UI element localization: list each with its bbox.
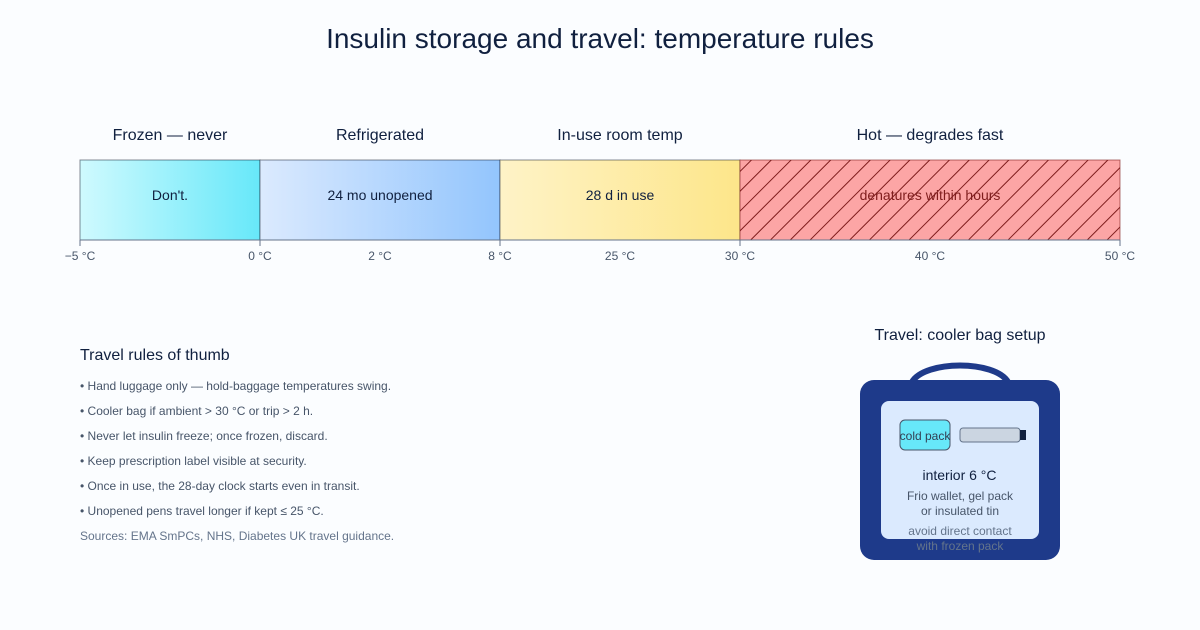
zone label: in-use: 28 d in use xyxy=(586,187,654,203)
panel: cooler bag: with frozen pack xyxy=(916,539,1004,553)
bag interior xyxy=(881,401,1039,539)
zone heading: frozen: Frozen — never xyxy=(113,127,228,144)
axis tick labels: 25 °C xyxy=(605,249,635,263)
panel: cooler bag xyxy=(860,327,1060,560)
icon: insulin pen xyxy=(960,428,1026,442)
bag warning: avoid direct contact xyxy=(908,524,1012,538)
rules list: • Cooler bag if ambient > 30 °C or trip > 2 h. xyxy=(80,404,313,418)
axis tick labels: 50 °C xyxy=(1105,249,1135,263)
panel: cooler bag: or insulated tin xyxy=(921,504,999,518)
rules list: • Unopened pens travel longer if kept ≤ 25 °C. xyxy=(80,504,324,518)
axis tick labels: 0 °C xyxy=(248,249,272,263)
zone label: hot: denatures within hours xyxy=(860,187,1000,203)
zone heading: refrigerated: Refrigerated xyxy=(336,127,424,144)
zone: in-use xyxy=(500,160,740,240)
zone heading: in-use: In-use room temp xyxy=(557,127,683,144)
panel: travel rules xyxy=(80,347,394,543)
title: Insulin storage and travel: temperature rules xyxy=(326,23,874,54)
rules list: • Never let insulin freeze; once frozen, discard. xyxy=(80,429,328,443)
axis tick labels: 8 °C xyxy=(488,249,512,263)
icon: bag handle xyxy=(912,366,1008,382)
axis tick labels: 2 °C xyxy=(368,249,392,263)
zone: refrigerated xyxy=(260,160,500,240)
axis tick labels: 40 °C xyxy=(915,249,945,263)
zone label: frozen: Don't. xyxy=(152,187,188,203)
rules list: • Hand luggage only — hold-baggage temperatures swing. xyxy=(80,379,391,393)
rules list: • Once in use, the 28-day clock starts even in transit. xyxy=(80,479,360,493)
temperature bar chart xyxy=(65,127,1135,263)
rules heading: Travel rules of thumb xyxy=(80,347,230,364)
zone: frozen xyxy=(80,160,260,240)
axis xyxy=(80,240,1120,246)
zone heading: hot: Hot — degrades fast xyxy=(857,127,1004,144)
rules list xyxy=(80,379,391,518)
icon: bag body xyxy=(860,380,1060,560)
icon: cold pack: cold pack xyxy=(900,429,951,443)
axis tick labels: 30 °C xyxy=(725,249,755,263)
axis tick labels: −5 °C xyxy=(65,249,96,263)
zone label: refrigerated: 24 mo unopened xyxy=(327,187,433,203)
interior temperature: interior 6 °C xyxy=(922,467,997,483)
cooler heading: Travel: cooler bag setup xyxy=(874,327,1046,344)
zone: hot xyxy=(740,160,1120,240)
icon: cold pack xyxy=(900,420,951,450)
bag note: Frio wallet, gel pack xyxy=(907,489,1014,503)
sources: Sources: EMA SmPCs, NHS, Diabetes UK travel guidance. xyxy=(80,529,394,543)
rules list: • Keep prescription label visible at security. xyxy=(80,454,307,468)
axis tick labels xyxy=(65,249,1135,263)
